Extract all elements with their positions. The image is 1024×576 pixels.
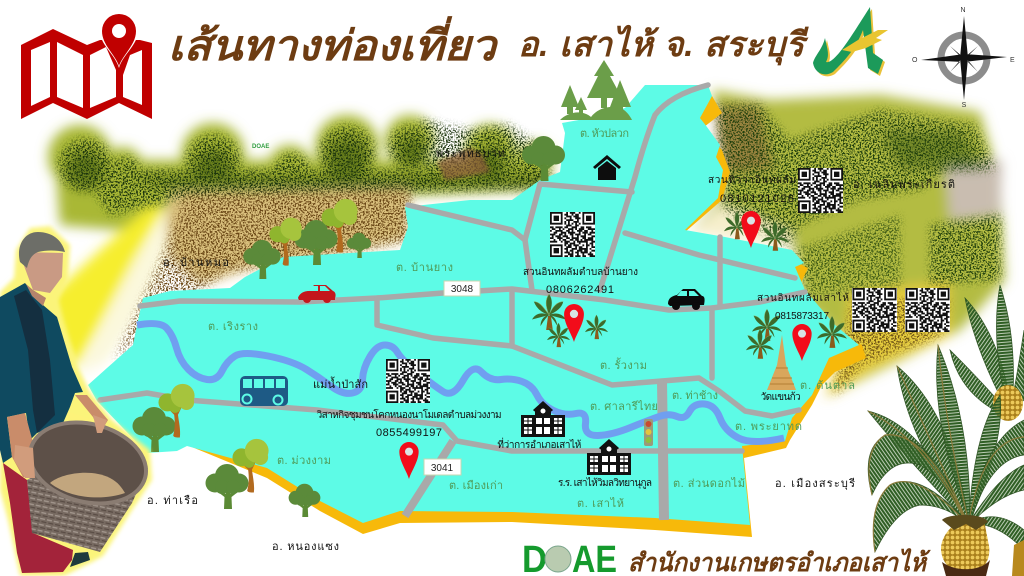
labels: places and phone numbers: พระพุทธบาท [436,148,505,160]
route sign 3041 [424,459,461,475]
map: roads [100,85,805,520]
labels: sub-districts: ต. บ้านยาง [396,262,453,274]
river: Pa Sak [137,324,784,442]
labels: sub-districts: ต. ม่วงงาม [277,455,331,467]
icon: black car [668,289,705,310]
tree group lower left [132,384,320,517]
labels: sub-districts: ต. หัวปลวก [580,128,629,140]
icon: pine trees on hill [560,60,632,120]
icon: district office school building [521,401,565,437]
labels: places and phone numbers: สวนอินทผลัมเสาไห้ [757,292,849,304]
labels: places and phone numbers: สวนทิววาอินทผลัม [708,175,796,186]
labels: places and phone numbers: 0810121028 [720,193,794,205]
labels: neighbouring districts: อ. เฉลิมพระเกียรติ [853,178,955,191]
footer logo: DOAE [522,539,617,576]
map: orange shadow edge of district [147,96,866,537]
labels: places and phone numbers: วิสาหกิจชุมชนโคกหนองนาโมเดลตำบลม่วงงาม [316,408,502,421]
shirt shadow [14,290,55,433]
labels: sub-districts [208,128,855,510]
labels: sub-districts: ต. เมืองเก่า [449,479,503,492]
labels: sub-districts: ต. พระยาทด [735,421,802,433]
logo: green letter A with rice [813,7,888,76]
temple photo detail [437,148,490,180]
labels: sub-districts: ต. ท่าช้าง [672,390,718,402]
pin: Muang Ngam [399,442,419,479]
route sign 3041: 3041 [431,463,454,474]
labels: neighbouring districts: อ. เมืองสระบุรี [775,477,855,490]
labels: places and phone numbers: ที่ว่าการอำเภอเสาไห้ [497,437,581,451]
dark foot [70,552,90,567]
hands [14,415,107,478]
labels: places and phone numbers: ร.ร. เสาไห้วิมลวิทยานุกูล [558,477,652,489]
labels: sub-districts: ต. รั้วงาม [600,357,647,372]
icon: compass rose: S [962,102,967,109]
labels: places and phone numbers: แม่น้ำป่าสัก [313,376,368,391]
palms and pin: north-east garden [724,211,789,251]
right forearm [75,395,108,433]
route sign 3048 [444,281,480,296]
photo background: left rice field and tree line [48,115,553,375]
photo background: right field [690,90,1005,398]
left forearm [7,413,35,477]
labels: neighbouring districts: อ. หนองแซง [272,541,339,553]
basket body [27,440,148,552]
QR: community enterprise [384,357,432,405]
QR: Sao Hai garden 1 [851,286,898,334]
tree group upper left [243,199,371,279]
labels: places and phone numbers: 0855499197 [376,427,442,439]
QR: Sao Hai garden 2 [904,286,951,334]
rice in basket [50,473,125,497]
labels: places and phone numbers: 0815873317 [775,311,829,322]
icon: traffic light [644,419,653,446]
labels: sub-districts: ต. เสาไห้ [577,497,624,510]
icon: folded map with pin [21,12,152,119]
subtitle: อ. เสาไห้ จ. สระบุรี [518,24,809,66]
icon: compass rose: O [912,57,918,64]
QR: Ban Yang [548,210,597,259]
hair [19,232,65,268]
QR: north-east garden [796,166,845,215]
icon: compass rose [912,7,1015,109]
face [23,252,63,293]
route sign 3048: 3048 [451,284,474,295]
yellow gap under arm [63,410,93,424]
map: district area [88,85,859,525]
labels: neighbouring districts [147,178,955,553]
labels: sub-districts: ต. เริงราง [208,321,258,333]
palms and pin: Sao Hai garden [746,309,847,361]
neck collar [26,284,46,306]
palms and pin: Ban Yang garden [532,294,608,347]
icon: school building [587,439,631,475]
labels: places and phone numbers: วัดแขนก้ว [761,391,801,403]
labels: neighbouring districts: อ. ท่าเรือ [147,494,198,507]
basket inside [21,411,155,515]
teal shirt [0,283,83,463]
icon: compass rose: E [1010,57,1015,64]
yellow halo around woman [0,226,152,576]
labels: sub-districts: ต. ต้นตาล [800,380,855,392]
photo: date palm trees [868,285,1024,576]
small DOAE mark: DOAE [252,144,269,150]
labels: neighbouring districts: อ. บ้านหมอ [163,257,229,269]
labels: places and phone numbers: 0806262491 [546,284,614,296]
labels: sub-districts: ต. ศาลารีไทย [590,400,658,413]
icon: house [593,155,621,180]
labels: sub-districts: ต. ส่วนดอกไม้ [673,477,745,490]
labels: places and phone numbers: สวนอินทผลัมตำบลบ้านยาง [523,266,638,278]
title: เส้นทางท่องเที่ยว [168,16,499,69]
icon: stupa [767,335,796,390]
icon: compass rose: N [960,7,966,14]
icon: large tree on field [522,136,565,181]
red skirt [3,463,73,573]
labels: places and phone numbers [313,148,849,489]
photo: woman holding basket [0,226,155,576]
icon: red car [298,285,336,303]
icon: bus [240,376,288,406]
